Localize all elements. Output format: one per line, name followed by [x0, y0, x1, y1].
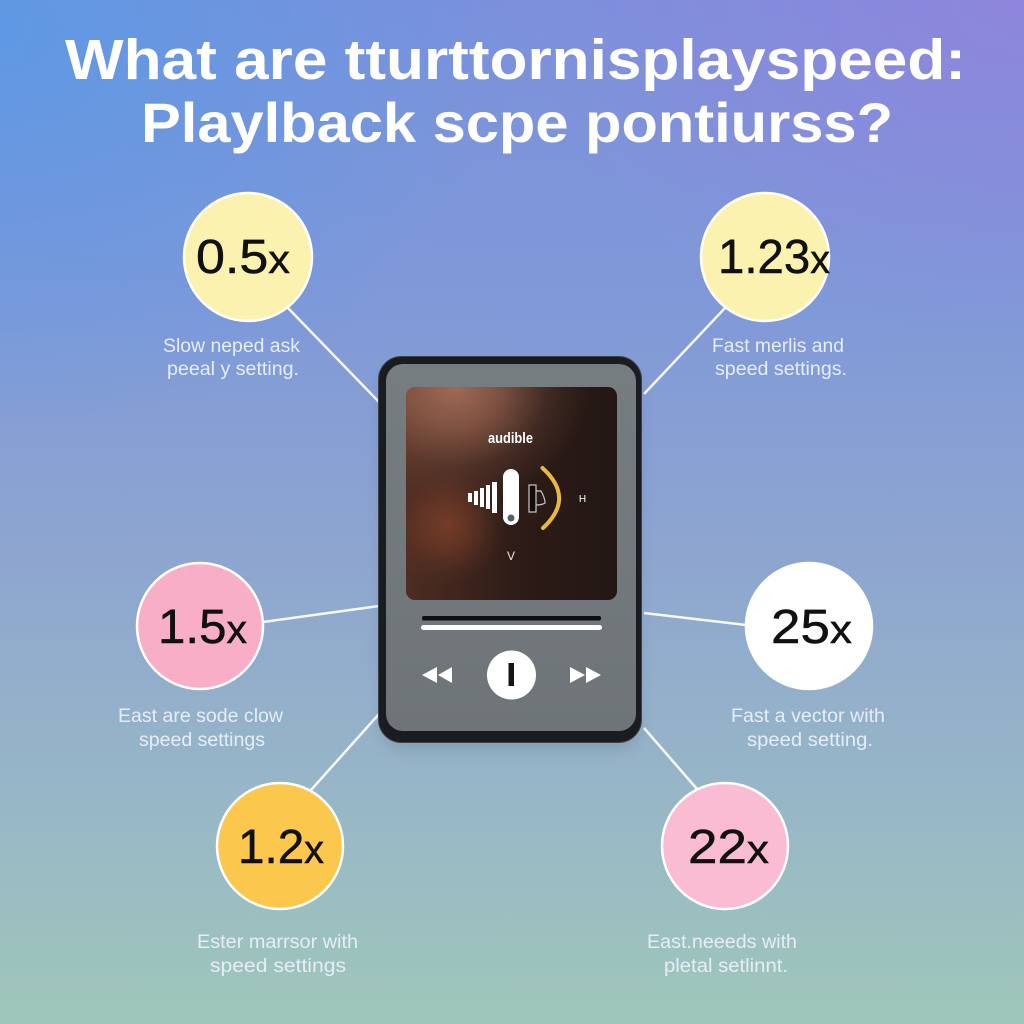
speed node: 1.2x	[217, 783, 343, 909]
caption: 22x: pletal setlinnt.	[664, 956, 788, 977]
speed node: 1.5x	[137, 563, 263, 689]
album art screen	[406, 387, 617, 600]
caption: 1.5x: speed settings	[139, 730, 265, 751]
media player device	[378, 356, 642, 751]
caption: 1.2x	[197, 932, 358, 977]
caption: 0.5x	[163, 336, 300, 380]
icon: sound bars	[468, 482, 497, 513]
caption: 1.23x: Fast merlis and	[712, 336, 844, 357]
icon: capsule speaker	[503, 469, 519, 525]
audible label: audible	[488, 430, 533, 447]
speed node: 25x: 25x	[771, 601, 852, 654]
speed node: 1.23x	[701, 193, 830, 321]
connector lines	[263, 308, 746, 790]
caption: 1.23x	[712, 336, 847, 380]
small mark right: H	[579, 494, 586, 505]
speed node: 22x: 22x	[688, 821, 769, 874]
title: What are tturttornisplayspeed:	[65, 28, 966, 92]
speed node: 1.23x: 1.23x	[718, 231, 830, 284]
speed node: 1.2x: 1.2x	[238, 821, 324, 874]
progress bar light	[421, 625, 602, 630]
caption: 22x: East.neeeds with	[647, 932, 797, 953]
caption: 25x: speed setting.	[747, 730, 873, 751]
icon: small speaker outline	[529, 485, 545, 512]
icon: rewind	[422, 667, 452, 683]
device face	[386, 364, 636, 731]
caption: 25x	[731, 706, 885, 751]
caption: 1.5x: East are sode clow	[118, 706, 283, 727]
device frame	[378, 356, 642, 742]
caption: 22x	[647, 932, 797, 977]
small mark below: V	[507, 549, 515, 563]
icon: play button	[487, 650, 536, 700]
caption: 0.5x: peeal y setting.	[167, 359, 299, 380]
speed node: 0.5x	[184, 193, 312, 321]
icon: yellow arc	[542, 468, 559, 528]
caption: 1.2x: speed settings	[210, 956, 346, 977]
speed node: 0.5x: 0.5x	[196, 231, 290, 284]
caption: 1.23x: speed settings.	[715, 359, 847, 380]
caption: 25x: Fast a vector with	[731, 706, 885, 727]
caption: 1.5x	[118, 706, 283, 751]
speed node: 25x	[746, 563, 872, 689]
title: Playlback scpe pontiurss?	[141, 91, 893, 154]
progress bar dark	[422, 616, 601, 620]
title	[65, 28, 966, 154]
caption: 1.2x: Ester marrsor with	[197, 932, 358, 953]
icon: fast forward	[570, 667, 601, 683]
speed node: 22x	[662, 783, 788, 909]
speed node: 1.5x: 1.5x	[158, 601, 247, 654]
caption: 0.5x: Slow neped ask	[163, 336, 300, 357]
